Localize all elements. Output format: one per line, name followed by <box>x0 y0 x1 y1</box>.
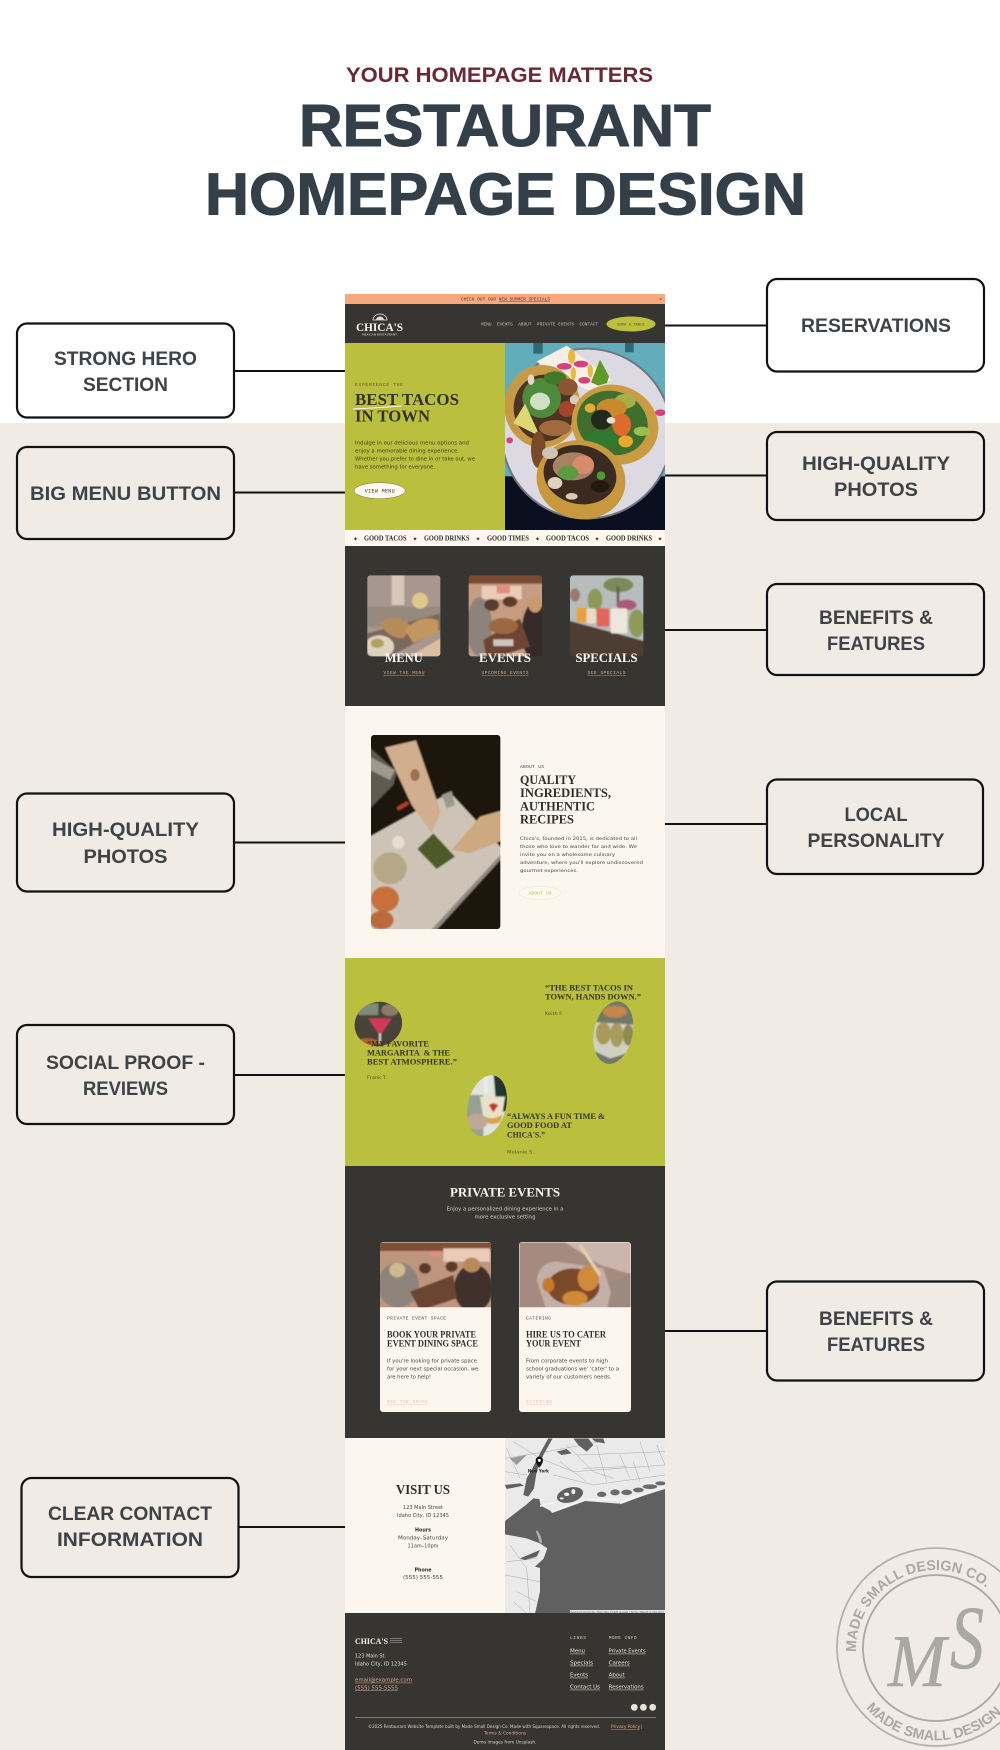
section heading: PRIVATE EVENTS <box>450 1185 560 1200</box>
copyright text: Demo images from Unsplash. <box>474 1740 536 1744</box>
view menu button: VIEW MENU <box>365 488 395 494</box>
callout: strong hero section <box>17 324 345 418</box>
footer logo: CHICA'S <box>355 1636 388 1646</box>
map pin <box>536 1457 543 1468</box>
panel: reviews <box>345 958 665 1166</box>
marquee strip: GOOD DRINKS <box>424 535 470 543</box>
callout: clear contact information: CLEAR CONTACT <box>48 1503 212 1525</box>
hero text: EXPERIENCE THE <box>355 382 403 388</box>
card: private event space: EVENT DINING SPACE <box>387 1339 478 1349</box>
copyright text: Terms & Conditions <box>483 1730 526 1736</box>
map: New York <box>528 1468 549 1473</box>
review 3: GOOD FOOD AT <box>507 1120 572 1130</box>
section subtitle: more exclusive setting <box>474 1214 536 1220</box>
contact text: VISIT US <box>396 1482 450 1497</box>
photo: margarita <box>354 1002 402 1046</box>
card: catering <box>516 1239 634 1412</box>
card links: VIEW THE MENU <box>384 670 425 676</box>
callout: high-quality photos right: HIGH-QUALITY <box>802 453 950 475</box>
callout: benefits and features 1 <box>665 584 984 675</box>
panel: menu events specials: EVENTS <box>479 650 531 665</box>
panel: menu events specials: SPECIALS <box>576 650 638 665</box>
map <box>505 1438 666 1614</box>
footer links: Menu <box>570 1649 585 1655</box>
contact text: Monday–Saturday <box>398 1535 448 1541</box>
taco right <box>572 384 658 464</box>
callout: high-quality photos left <box>17 794 345 892</box>
card: catering: school graduations we' 'cater' to a <box>526 1366 619 1372</box>
marquee strip: ✦ <box>535 536 540 543</box>
map: Keyboard shortcuts | Map data ©2025 Google | Terms | Report a map error <box>571 1610 665 1614</box>
callout: local personality <box>665 780 983 874</box>
about text: gourmet experiences. <box>520 868 578 874</box>
callout: big menu button: BIG MENU BUTTON <box>30 483 221 505</box>
callout: high-quality photos left: HIGH-QUALITY <box>52 819 199 841</box>
about text: those who love to wander far and wide. We <box>520 844 637 850</box>
panel: about us <box>345 706 665 958</box>
callout: clear contact information <box>22 1478 345 1577</box>
photo: chef chopping herbs <box>367 732 503 932</box>
review 3 <box>507 1111 605 1156</box>
photo: private dining party <box>380 1242 491 1308</box>
copyright text <box>368 1724 642 1744</box>
card titles: MENU <box>385 650 423 665</box>
book a table button <box>606 316 656 332</box>
taco left <box>504 365 580 448</box>
hero text: Indulge in our delicious menu options and <box>355 440 469 446</box>
callout: strong hero section: SECTION <box>83 374 168 396</box>
review 2: Keith F. <box>545 1011 563 1017</box>
callout: benefits and features 2: BENEFITS & <box>819 1308 933 1330</box>
logo: MEXICAN RESTAURANT <box>362 334 398 336</box>
section subtitle <box>446 1206 564 1220</box>
contact text: Idaho City, ID 12345 <box>397 1513 449 1519</box>
marquee strip: ✦ <box>353 536 358 543</box>
review 2 <box>545 982 641 1017</box>
review 1: Frank T. <box>367 1075 387 1081</box>
review photos <box>350 997 638 1140</box>
about text: adventure, where you'll explore undiscovered <box>520 860 643 866</box>
footer contact: Idaho City, ID 12345 <box>355 1662 407 1668</box>
about us button <box>519 886 561 900</box>
footer links: LINKS <box>570 1635 586 1641</box>
callout: clear contact information: INFORMATION <box>57 1529 203 1551</box>
contact text: Hours <box>415 1528 431 1534</box>
footer links: Careers <box>609 1661 630 1667</box>
about text: invite you on a wholesome culinary <box>520 852 615 858</box>
callout: local personality: LOCAL <box>844 804 908 826</box>
view menu button <box>354 483 405 499</box>
footer links: MORE INFO <box>609 1635 637 1641</box>
about us button: ABOUT US <box>528 892 552 896</box>
footer contact: 123 Main St. <box>355 1654 386 1660</box>
marquee strip: GOOD TACOS <box>364 535 407 543</box>
card: private event space: BOOK YOUR PRIVATE <box>387 1330 476 1340</box>
callout: reservations <box>665 279 984 372</box>
eyebrow heading: YOUR HOMEPAGE MATTERS <box>346 64 653 87</box>
hero section <box>345 343 673 530</box>
callout: social proof reviews: REVIEWS <box>83 1078 168 1100</box>
panel: private events <box>345 1166 665 1438</box>
copyright text: | <box>641 1724 642 1729</box>
callout: benefits and features 1: FEATURES <box>827 633 925 655</box>
callout: social proof reviews: SOCIAL PROOF - <box>46 1052 205 1074</box>
callout: reservations: RESERVATIONS <box>801 315 951 337</box>
panel: footer <box>345 1613 665 1750</box>
announcement bar: CHECK OUT OUR NEW SUMMER SPECIALS <box>461 298 550 302</box>
callout: benefits and features 2: FEATURES <box>827 1334 925 1356</box>
book a table button: BOOK A TABLE <box>617 324 645 328</box>
card: private event space: If you're looking for private space <box>387 1358 477 1364</box>
photo: colourful drinks <box>570 575 644 656</box>
taco bottom <box>536 440 626 520</box>
footer links: Contact Us <box>570 1685 601 1691</box>
card: private event space: SEE THE SPACE <box>387 1400 428 1405</box>
marquee strip: GOOD DRINKS <box>606 535 652 543</box>
photo: tacos on a plate <box>501 343 673 530</box>
announcement bar <box>345 294 665 304</box>
contact text: Phone <box>414 1568 432 1574</box>
contact text: (555) 555-555 <box>403 1575 443 1581</box>
contact text: 11am–10pm <box>408 1543 439 1549</box>
review 1: “MY FAVORITE <box>367 1039 429 1049</box>
card: catering: HIRE US TO CATER <box>526 1330 606 1340</box>
review 2: TOWN, HANDS DOWN.” <box>545 991 641 1001</box>
watermark logo stamp: MADE SMALL DESIGN CO. <box>846 1560 987 1652</box>
marquee strip: GOOD TACOS <box>546 535 589 543</box>
title block <box>205 64 806 228</box>
marquee strip: ✦ <box>412 536 418 543</box>
footer links: Reservations <box>609 1685 644 1691</box>
navigation bar <box>345 304 665 343</box>
review 1: BEST ATMOSPHERE.” <box>367 1057 457 1067</box>
callout: strong hero section: STRONG HERO <box>54 348 197 370</box>
about text <box>520 764 643 874</box>
marquee strip: GOOD TIMES <box>487 535 529 543</box>
logo <box>356 314 403 336</box>
about text: Chica's, founded in 2015, is dedicated to all <box>520 836 637 842</box>
review 1 <box>367 1039 457 1081</box>
callout: high-quality photos left: PHOTOS <box>84 846 168 868</box>
watermark logo stamp: S <box>950 1589 984 1688</box>
review 3: Melanie S. <box>507 1150 534 1156</box>
website mockup <box>345 294 673 1750</box>
contact text <box>396 1482 450 1581</box>
card: catering: From corporate events to high <box>526 1358 608 1364</box>
callout: social proof reviews <box>17 1025 345 1124</box>
logo: CHICA'S <box>356 322 403 334</box>
card text: CATERING <box>526 1316 551 1322</box>
footer links <box>570 1635 646 1691</box>
footer contact: email@example.com <box>355 1678 412 1684</box>
section subtitle: Enjoy a personalized dining experience in a <box>446 1206 564 1212</box>
marquee strip: ✦ <box>657 536 663 543</box>
callout: big menu button <box>17 447 345 539</box>
card: private event space: are here to help! <box>387 1374 431 1380</box>
hero text: IN TOWN <box>355 406 430 426</box>
announcement bar: × <box>659 296 662 302</box>
card: catering: variety of our customers needs. <box>526 1374 612 1380</box>
review 3: “ALWAYS A FUN TIME & <box>507 1111 605 1121</box>
marquee strip: ✦ <box>475 536 481 543</box>
copyright text: ©2025 Restaurant Website Template built by Made Small Design Co. Made with Squarespace. All rights reserved. <box>368 1724 600 1729</box>
about text: RECIPES <box>520 812 574 826</box>
hero text <box>353 382 475 470</box>
about text: ABOUT US <box>520 764 544 770</box>
card: catering: CATERING <box>526 1400 552 1405</box>
card: private event space: for your next special occasion, we <box>387 1366 479 1372</box>
about text: QUALITY <box>520 772 577 787</box>
copyright text: Privacy Policy <box>611 1724 641 1729</box>
photo: catering tray <box>519 1242 631 1308</box>
main title line 1: RESTAURANT <box>299 93 711 159</box>
panel: menu events specials: SEE SPECIALS <box>588 670 626 676</box>
callout: high-quality photos right: PHOTOS <box>834 479 918 501</box>
hero text: have something for everyone. <box>355 464 435 470</box>
social icons <box>631 1704 656 1711</box>
photo: tacos and margarita <box>367 575 440 656</box>
footer links: Private Events <box>609 1649 646 1655</box>
callout: high-quality photos right <box>665 432 984 520</box>
photo: tacos on tray <box>593 1001 634 1064</box>
hero text: enjoy a memorable dining experience. <box>355 448 459 454</box>
panel: menu events specials <box>345 546 665 706</box>
footer contact <box>355 1654 412 1692</box>
callout: local personality: PERSONALITY <box>808 830 944 852</box>
callout: benefits and features 2 <box>665 1282 984 1380</box>
contact text: 123 Main Street <box>403 1505 443 1511</box>
marquee strip <box>345 530 665 546</box>
nav links: MENU EVENTS ABOUT PRIVATE EVENTS CONTACT <box>481 324 598 328</box>
photo: crowded dining <box>468 575 542 656</box>
panel: visit us <box>345 1438 666 1614</box>
footer links: Events <box>570 1673 589 1679</box>
card text: PRIVATE EVENT SPACE <box>387 1316 446 1322</box>
watermark logo stamp <box>836 1547 1000 1747</box>
review 3: CHICA'S.” <box>507 1129 545 1139</box>
footer links: About <box>609 1673 625 1679</box>
watermark logo stamp: M <box>887 1621 950 1703</box>
main title line 2: HOMEPAGE DESIGN <box>205 162 806 228</box>
photo: drink in hand <box>467 1075 507 1136</box>
hero text: BEST TACOS <box>355 390 459 409</box>
card: catering: YOUR EVENT <box>526 1339 581 1349</box>
about text: AUTHENTIC <box>520 798 595 814</box>
footer contact: (555) 555-5555 <box>355 1686 398 1692</box>
review 2: “THE BEST TACOS IN <box>545 982 634 992</box>
marquee strip: ✦ <box>594 536 600 543</box>
panel: menu events specials: UPCOMING EVENTS <box>482 670 529 676</box>
footer links: Specials <box>570 1661 594 1667</box>
card: private event space <box>377 1239 494 1412</box>
callout: benefits and features 1: BENEFITS & <box>819 607 933 629</box>
review 1: MARGARITA & THE <box>367 1048 450 1058</box>
hero text: Whether you prefer to dine in or take out, we <box>355 456 475 462</box>
about text: INGREDIENTS, <box>520 785 611 800</box>
